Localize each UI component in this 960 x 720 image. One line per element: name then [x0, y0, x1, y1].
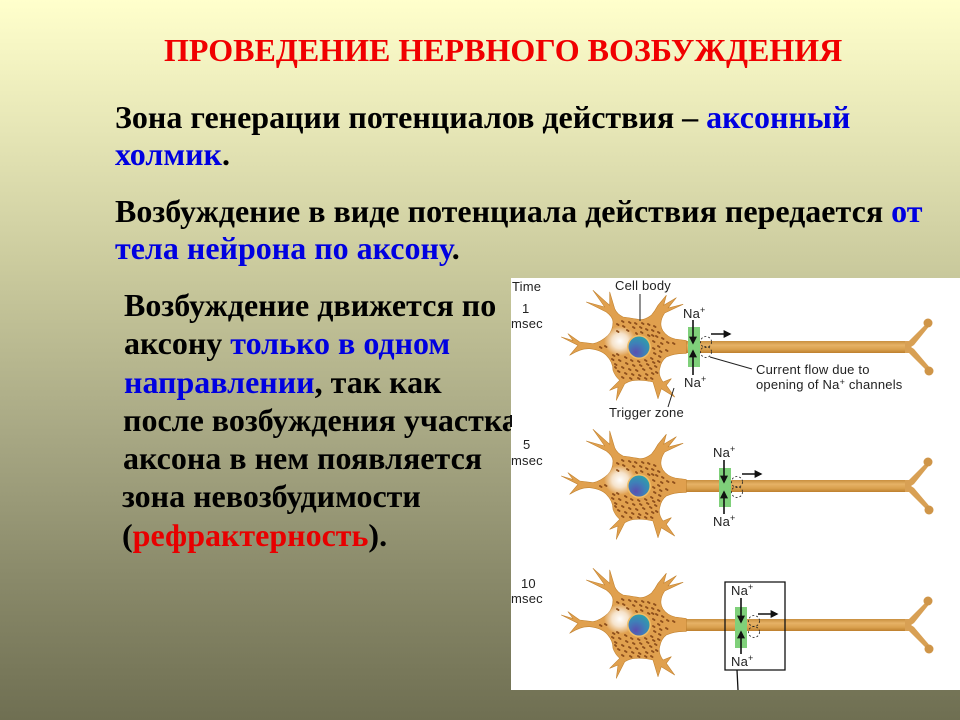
- text block: generation zone: [115, 99, 850, 172]
- text block: refractoriness: аксона в нем появляется: [123, 440, 482, 476]
- text block: refractoriness: после возбуждения участка: [123, 402, 518, 438]
- arrow: propagation direction: [758, 613, 777, 615]
- icon: current-flow loop: [748, 616, 760, 638]
- icon: sodium channel zone: [719, 468, 731, 507]
- labels: opening of Na: [756, 377, 840, 392]
- text block: refractoriness: аксону только в одном: [124, 325, 450, 361]
- labels: channels: [845, 377, 903, 392]
- labels: 10: [521, 576, 536, 591]
- labels: +: [730, 444, 736, 454]
- labels: +: [730, 513, 736, 523]
- labels: +: [700, 305, 706, 315]
- neuron at 5 msec: [511, 429, 934, 539]
- panel: neuron diagram: [511, 278, 960, 690]
- text block: direction of conduction: [115, 193, 922, 266]
- labels: Na: [683, 306, 700, 321]
- text block: direction of conduction: тела нейрона по аксону.: [115, 230, 460, 266]
- text block: generation zone: холмик.: [115, 136, 230, 172]
- labels: msec: [511, 453, 543, 468]
- icon: current-flow loop: [732, 476, 742, 498]
- labels: msec: [511, 316, 543, 331]
- text block: refractoriness: направлении, так как: [124, 364, 442, 400]
- icon: sodium channel zone: [688, 327, 700, 367]
- labels: +: [748, 653, 754, 663]
- labels: 5: [523, 437, 530, 452]
- text block: refractoriness: Возбуждение движется по: [124, 287, 496, 323]
- text block: generation zone: Зона генерации потенциалов действия – аксонный: [115, 99, 850, 135]
- callout box: [725, 582, 785, 690]
- arrow: Na+ inflow: [740, 598, 742, 654]
- labels: Trigger zone: [609, 405, 684, 420]
- leader lines: [640, 294, 752, 407]
- labels: +: [748, 582, 754, 592]
- labels: Na: [684, 375, 701, 390]
- icon: current-flow loop: [700, 336, 712, 358]
- labels: Na: [731, 583, 748, 598]
- arrow: Na+ inflow: [692, 320, 694, 375]
- arrow: Na+ inflow: [723, 460, 725, 514]
- labels: Time: [512, 279, 541, 294]
- labels: Na: [731, 654, 748, 669]
- arrow: propagation direction: [711, 333, 730, 335]
- labels: Current flow due to: [756, 362, 870, 377]
- text block: refractoriness: (рефрактерность).: [122, 517, 387, 553]
- icon: sodium channel zone: [735, 607, 747, 648]
- labels: Cell body: [615, 278, 671, 293]
- labels: [511, 576, 754, 669]
- neuron at 10 msec: [511, 568, 934, 690]
- arrow: propagation direction: [742, 473, 761, 475]
- title: ПРОВЕДЕНИЕ НЕРВНОГО ВОЗБУЖДЕНИЯ: [164, 32, 842, 68]
- labels: [511, 437, 736, 529]
- text block: refractoriness: [122, 287, 518, 553]
- neuron at 1 msec: [511, 278, 934, 420]
- labels: 1: [522, 301, 529, 316]
- labels: +: [701, 374, 706, 384]
- labels: msec: [511, 591, 543, 606]
- text block: direction of conduction: Возбуждение в виде потенциала действия передается от: [115, 193, 922, 229]
- text block: refractoriness: зона невозбудимости: [122, 478, 421, 514]
- labels: Na: [713, 514, 730, 529]
- labels: [511, 278, 903, 420]
- labels: +: [840, 377, 845, 387]
- labels: Na: [713, 445, 730, 460]
